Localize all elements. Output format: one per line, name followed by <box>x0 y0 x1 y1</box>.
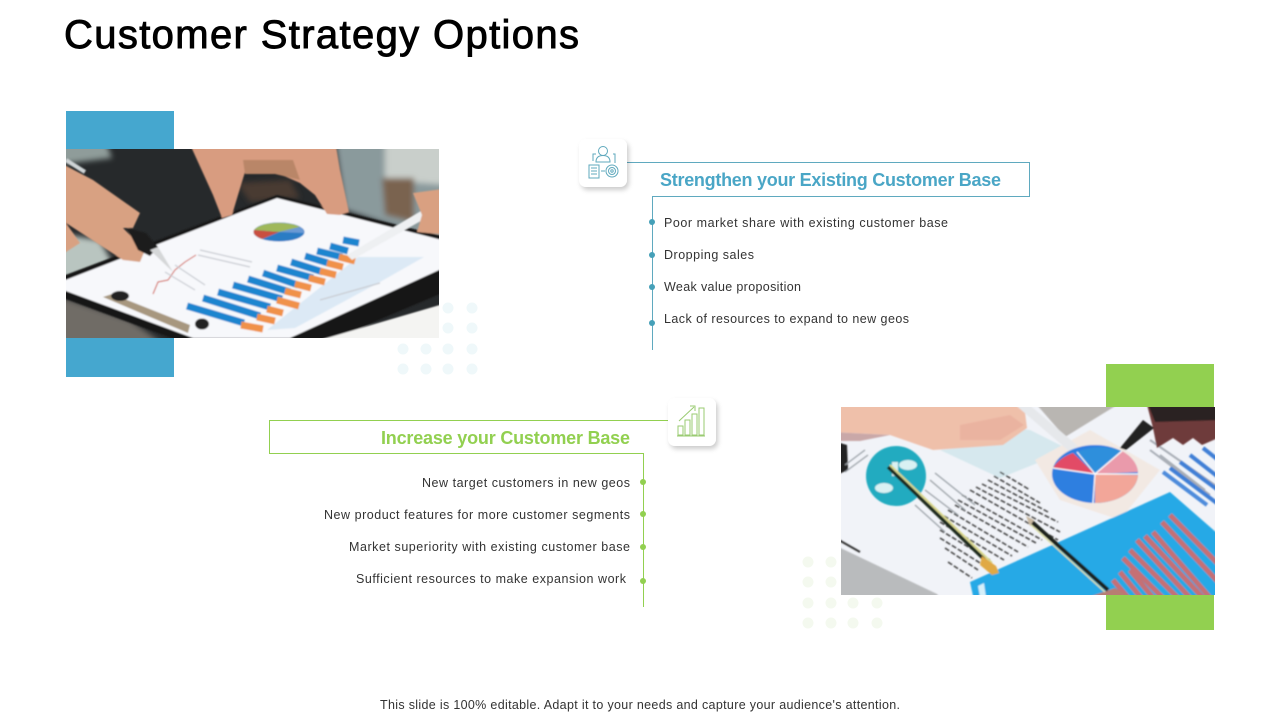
heading: increase: Increase your Customer Base <box>381 428 630 448</box>
section: strengthen your existing customer base <box>579 139 1030 350</box>
bullet list: increase: New target customers in new geos <box>422 476 630 490</box>
bullet list: strengthen <box>649 216 948 326</box>
footer note: This slide is 100% editable. Adapt it to your needs and capture your audience's attention. <box>380 698 900 712</box>
bullet list: increase: Market superiority with existing customer base <box>349 540 630 554</box>
clipboard <box>55 195 450 345</box>
icon card: customer and target <box>579 139 627 187</box>
text block <box>940 472 1060 578</box>
bullet list: strengthen: Weak value proposition <box>664 280 801 294</box>
blue accent block <box>66 111 174 377</box>
dot pattern: green <box>802 556 882 628</box>
photo: hands reviewing bar chart on clipboard <box>66 149 439 338</box>
connector frame: strengthen <box>627 162 1030 350</box>
dot pattern: blue <box>398 302 478 374</box>
small line chart <box>153 255 196 294</box>
title: Customer Strategy Options <box>64 13 579 57</box>
dark hand and pen <box>1146 407 1215 449</box>
photo: documents with pie chart and pencils <box>841 407 1215 595</box>
bullet list: increase <box>324 476 646 586</box>
section: increase your customer base <box>270 398 716 607</box>
green accent block <box>1106 364 1214 630</box>
bullet list: increase: Sufficient resources to make expansion work <box>356 572 627 586</box>
clip <box>103 294 190 333</box>
bullet list: strengthen: Lack of resources to expand to new geos <box>664 312 909 326</box>
pie <box>254 222 304 242</box>
pie <box>1052 445 1138 503</box>
bullet list: strengthen: Poor market share with existing customer base <box>664 216 948 230</box>
blue panel and red bars <box>969 491 1215 595</box>
icon card: growth chart <box>668 398 716 446</box>
white pen <box>1016 407 1076 450</box>
bullet list: increase: New product features for more customer segments <box>324 508 630 522</box>
teal circle <box>866 446 926 506</box>
heading: strengthen: Strengthen your Existing Customer Base <box>660 170 1001 190</box>
hand <box>841 407 1028 451</box>
bars <box>187 240 359 323</box>
connector frame: increase <box>270 420 668 607</box>
pencils <box>888 467 990 565</box>
hands <box>191 149 350 219</box>
bullet list: strengthen: Dropping sales <box>664 248 754 262</box>
right blue lines <box>1149 438 1215 496</box>
